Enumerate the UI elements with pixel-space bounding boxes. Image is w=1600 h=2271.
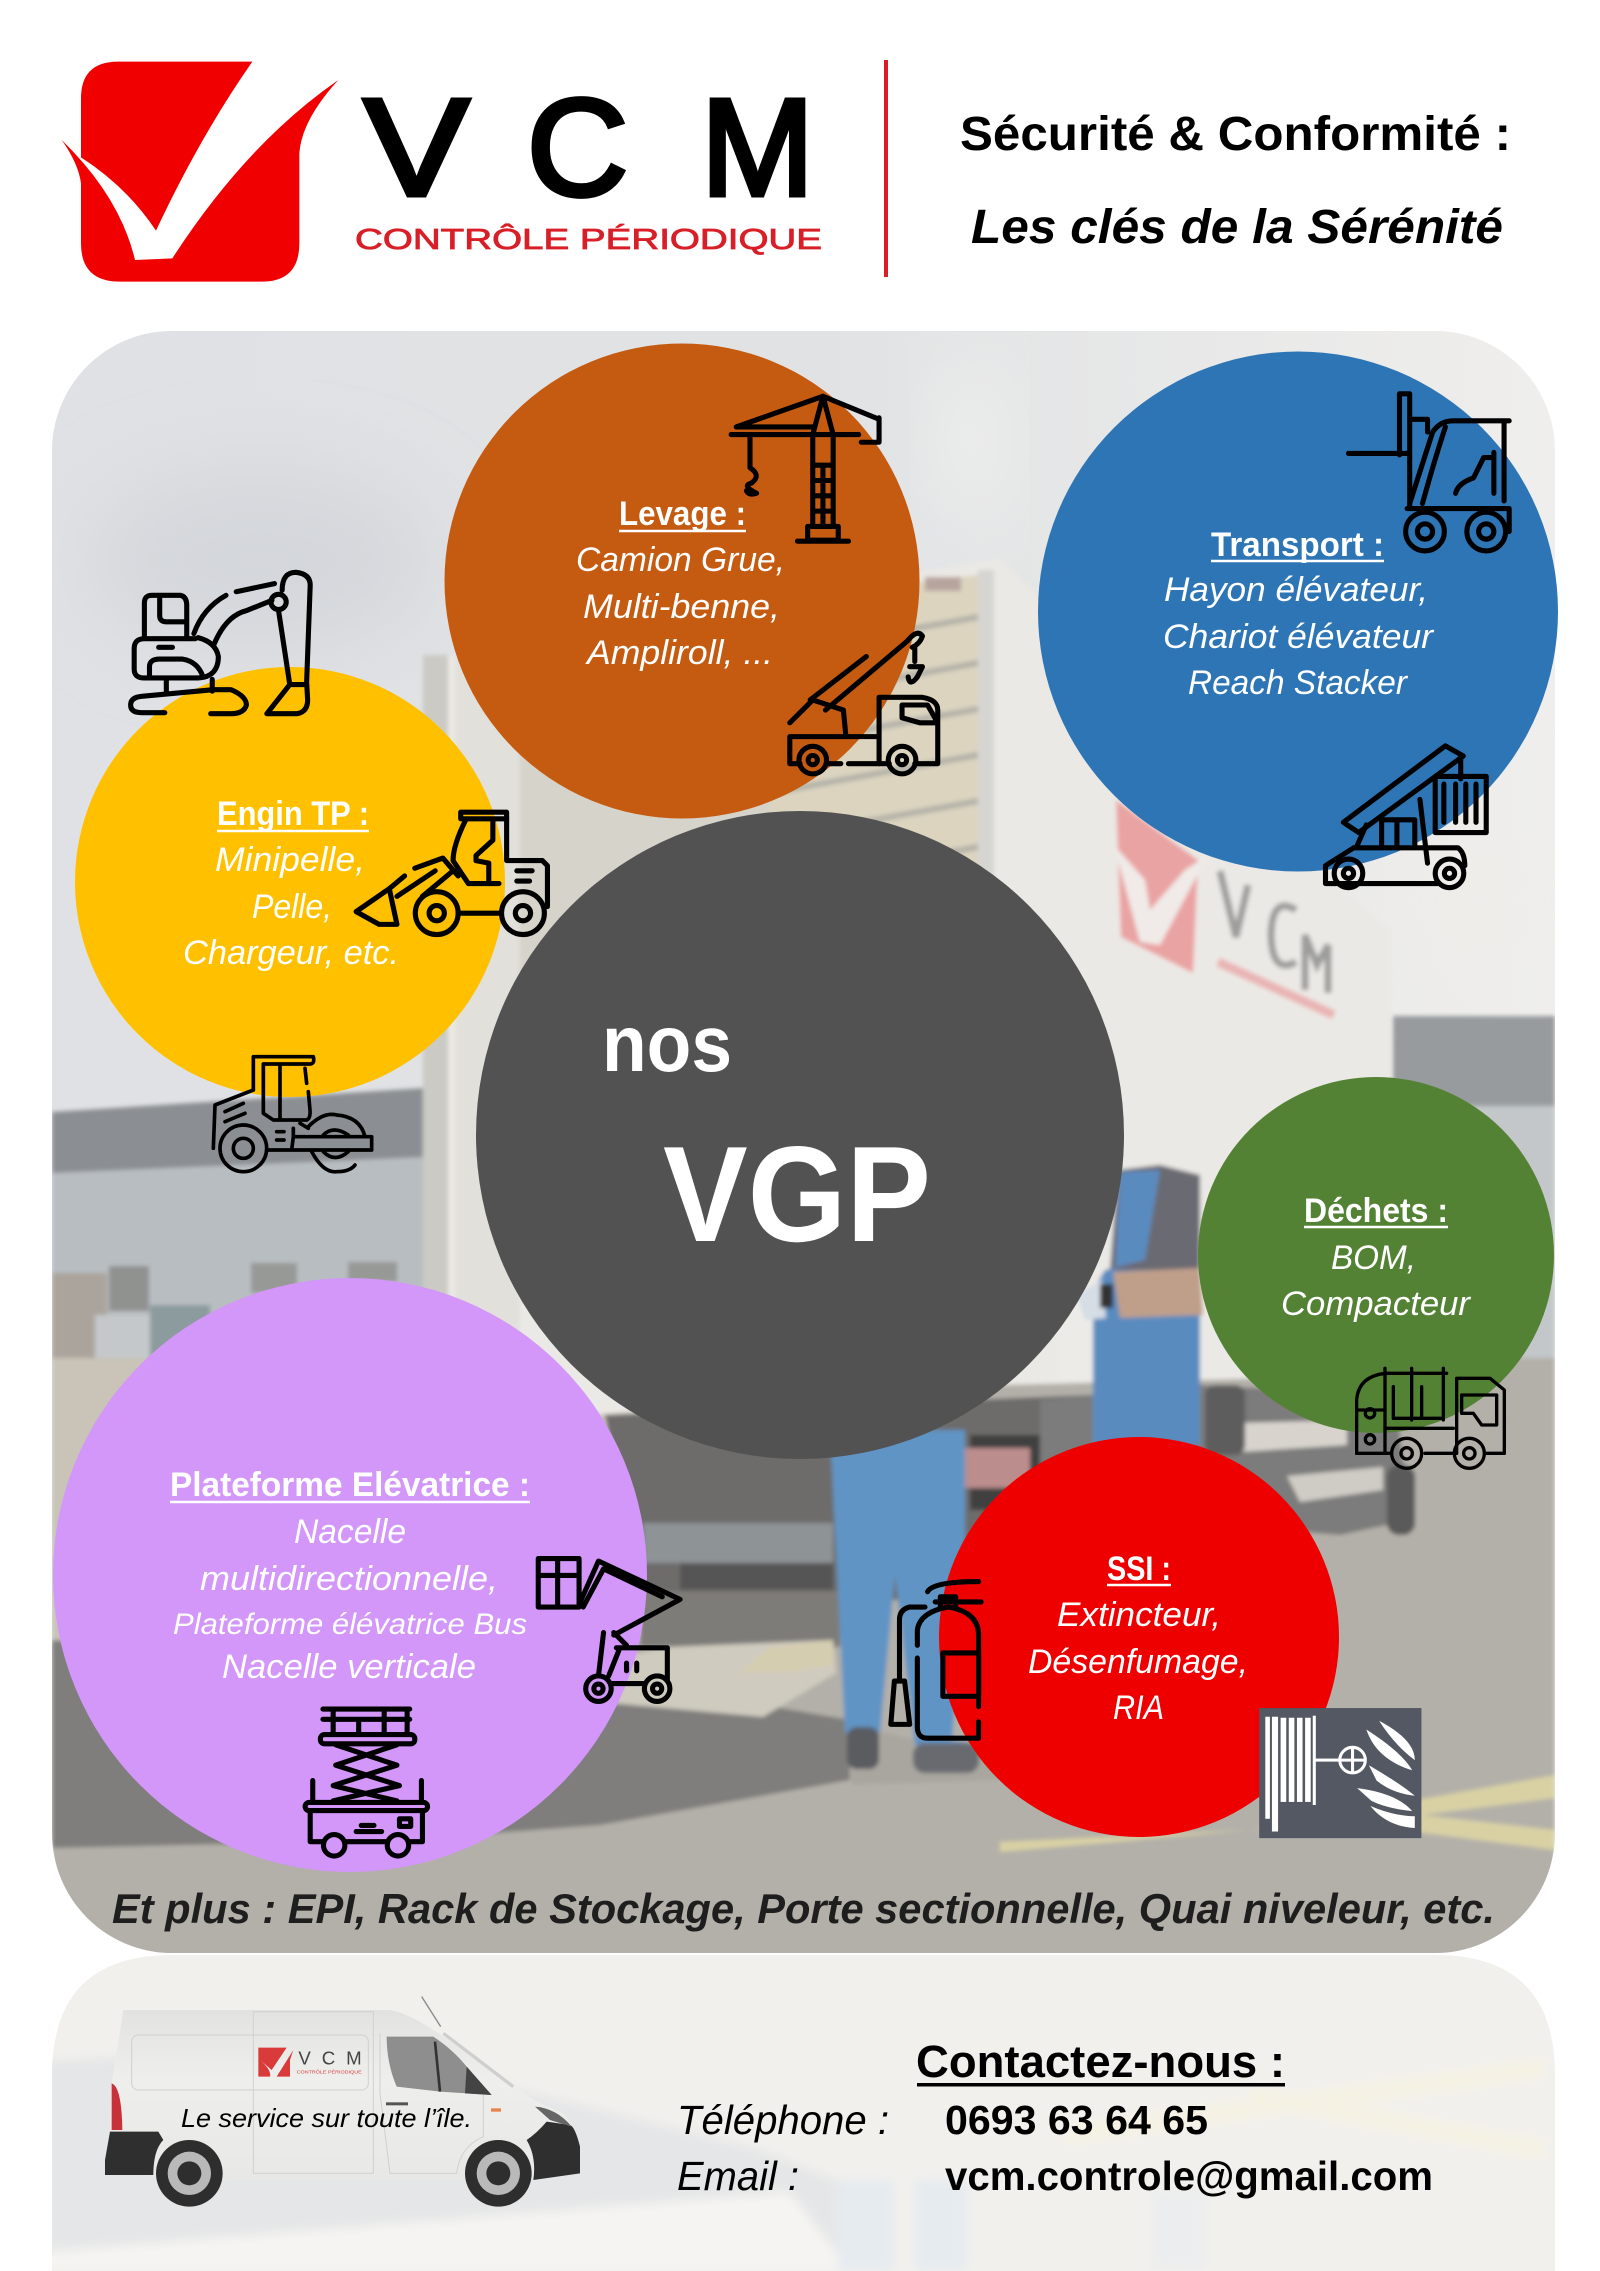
main photo panel [52, 331, 1555, 1958]
icon: reach stacker [1326, 746, 1486, 888]
logo: red checkmark square [62, 62, 338, 282]
contact block: Email : [677, 2153, 799, 2199]
circle: Plateforme Elevatrice: Plateforme élévatrice Bus [173, 1608, 527, 1641]
circle: SSI: SSI : [1107, 1550, 1171, 1588]
illustration: VCM van: VCM [298, 2047, 362, 2068]
circle: Plateforme Elevatrice: multidirectionnelle, [200, 1560, 498, 1598]
icon: scissor lift [305, 1709, 428, 1856]
circle: Engin TP: Pelle, [252, 888, 332, 926]
icon: fire extinguisher [891, 1582, 981, 1738]
icon: mini excavator [131, 572, 310, 714]
circle: Plateforme Elevatrice: Plateforme Elévatrice : [170, 1466, 530, 1504]
van caption: Le service sur toute l’île. [181, 2103, 472, 2133]
circle: Dechets [1198, 1077, 1554, 1433]
contact block: Téléphone : [677, 2097, 889, 2143]
logo wordmark VCM [364, 71, 814, 225]
circle: SSI: RIA [1113, 1689, 1164, 1727]
icon: forklift [1348, 394, 1509, 551]
logo wordmark VCM: C [527, 71, 628, 225]
circle: Plateforme Elevatrice: Nacelle [294, 1513, 406, 1551]
circle: Dechets: Déchets : [1304, 1192, 1448, 1230]
circle: Engin TP: Minipelle, [215, 841, 365, 879]
circle: Levage: Multi-benne, [583, 588, 780, 626]
icon: fire hose sign [1259, 1708, 1421, 1838]
circle: Levage: Levage : [619, 495, 746, 533]
circle: Transport: Reach Stacker [1188, 664, 1409, 702]
reflected photo panel [40, 1955, 1555, 2271]
heading: security and conformity: Sécurité & Conformité : [960, 108, 1511, 161]
circle: Transport: Hayon élévateur, [1164, 571, 1428, 609]
icon: boom lift [538, 1559, 680, 1701]
circle: Engin TP [75, 667, 505, 1097]
circle: Transport: Transport : [1211, 526, 1384, 564]
circle: Levage [444, 344, 920, 818]
circle: SSI: Désenfumage, [1028, 1643, 1248, 1681]
contact block [677, 2036, 1433, 2199]
circle: Dechets: BOM, [1331, 1239, 1416, 1277]
footnote: et plus: Et plus : EPI, Rack de Stockage, Porte sectionnelle, Quai niveleur, etc. [112, 1885, 1495, 1933]
circle: SSI: Extincteur, [1057, 1596, 1221, 1634]
circle: Plateforme Elevatrice: Nacelle verticale [222, 1648, 476, 1686]
red vertical divider [884, 60, 888, 277]
contact block: Contactez-nous : [916, 2036, 1285, 2087]
illustration: VCM van: CONTRÔLE PÉRIODIQUE [297, 2068, 362, 2074]
central circle: nos VGP: nos [602, 999, 732, 1088]
heading: keys to serenity: Les clés de la Sérénité [971, 201, 1503, 254]
circle: Plateforme Elevatrice [53, 1278, 647, 1872]
contact block: 0693 63 64 65 [945, 2097, 1208, 2143]
central circle: nos VGP: VGP [663, 1118, 931, 1270]
circle: SSI [939, 1437, 1339, 1837]
circle: Engin TP: Engin TP : [217, 795, 369, 833]
circle: Levage: Ampliroll, ... [585, 634, 773, 672]
icon: crane truck [790, 633, 938, 774]
icon: road roller [213, 1057, 372, 1172]
icon: garbage truck [1357, 1368, 1504, 1468]
logo tagline: CONTRÔLE PÉRIODIQUE [355, 222, 822, 256]
logo wordmark VCM: M [701, 71, 814, 225]
circle: Engin TP: Chargeur, etc. [183, 934, 399, 972]
circle: Transport: Chariot élévateur [1163, 618, 1435, 656]
circle: Levage: Camion Grue, [576, 541, 785, 579]
icon: loader [356, 812, 547, 935]
circle: Dechets: Compacteur [1281, 1285, 1472, 1323]
central circle: nos VGP [476, 811, 1124, 1459]
illustration: VCM van [105, 1997, 580, 2207]
logo wordmark VCM: V [364, 71, 469, 225]
contact block: vcm.controle@gmail.com [945, 2153, 1433, 2199]
icon: tower crane [731, 396, 879, 541]
circle: Transport [1038, 352, 1558, 872]
